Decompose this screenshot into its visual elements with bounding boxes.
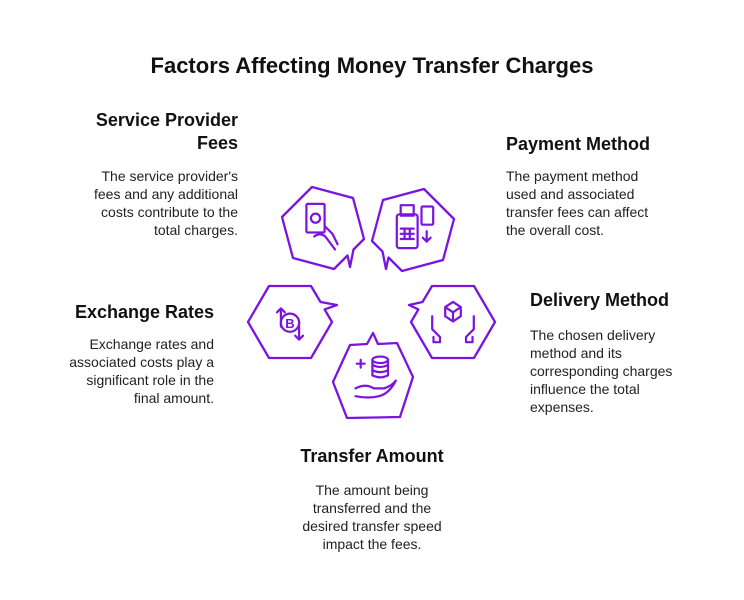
hexagon: payment method bbox=[372, 189, 454, 271]
text: service provider fees: costs contribute to the bbox=[101, 204, 238, 220]
text: delivery method: expenses. bbox=[530, 399, 594, 415]
text: service provider fees bbox=[94, 168, 238, 238]
text: payment method: The payment method bbox=[506, 168, 638, 184]
icon: card terminal bbox=[397, 205, 433, 248]
heading: exchange rates: Exchange Rates bbox=[75, 302, 214, 322]
icon: hands with box bbox=[432, 302, 474, 342]
text: exchange rates: associated costs play a bbox=[69, 354, 214, 370]
heading: transfer amount: Transfer Amount bbox=[300, 446, 444, 466]
text: exchange rates: final amount. bbox=[134, 390, 214, 406]
text: exchange rates: Exchange rates and bbox=[89, 336, 214, 352]
text: exchange rates: significant role in the bbox=[86, 372, 214, 388]
text: payment method: the overall cost. bbox=[506, 222, 604, 238]
text: delivery method bbox=[530, 327, 672, 415]
hexagon: exchange rates bbox=[248, 286, 337, 358]
text: payment method: used and associated bbox=[506, 186, 634, 202]
text: delivery method: The chosen delivery bbox=[530, 327, 655, 343]
text: payment method: transfer fees can affect bbox=[506, 204, 648, 220]
text: delivery method: influence the total bbox=[530, 381, 640, 397]
text: transfer amount bbox=[302, 482, 442, 552]
text: transfer amount: impact the fees. bbox=[323, 536, 421, 552]
text: exchange rates bbox=[69, 336, 214, 406]
hexagon: service provider fees bbox=[282, 187, 364, 269]
icon: coin exchange: B bbox=[285, 316, 295, 331]
text: delivery method: corresponding charges bbox=[530, 363, 672, 379]
text: service provider fees: fees and any additional bbox=[94, 186, 238, 202]
hexagon: delivery method bbox=[409, 286, 495, 358]
text: service provider fees: The service provider's bbox=[102, 168, 238, 184]
hexagon: transfer amount bbox=[333, 333, 413, 418]
text: delivery method: method and its bbox=[530, 345, 622, 361]
heading: service provider fees: Service Provider bbox=[96, 110, 238, 130]
heading: payment method: Payment Method bbox=[506, 134, 650, 154]
text: transfer amount: transferred and the bbox=[313, 500, 431, 516]
text: transfer amount: desired transfer speed bbox=[302, 518, 442, 534]
icon: coins in hand bbox=[356, 357, 396, 398]
heading: service provider fees: Fees bbox=[197, 133, 238, 153]
title: Factors Affecting Money Transfer Charges bbox=[151, 53, 593, 78]
heading: service provider fees bbox=[96, 110, 238, 153]
text: transfer amount: The amount being bbox=[316, 482, 428, 498]
icon: cash in hand bbox=[306, 204, 338, 249]
text: service provider fees: total charges. bbox=[154, 222, 238, 238]
heading: delivery method: Delivery Method bbox=[530, 290, 669, 310]
text: payment method bbox=[506, 168, 648, 238]
